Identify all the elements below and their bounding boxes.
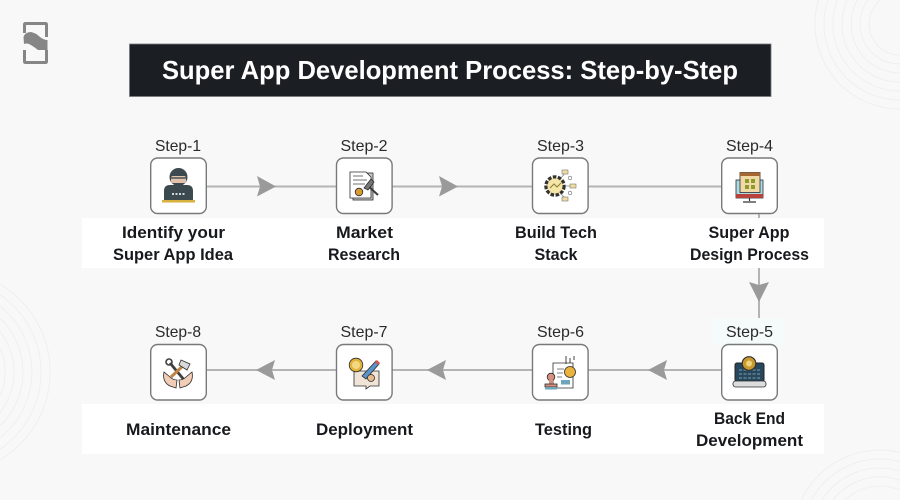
icon: coin, pencil and notes [349, 358, 380, 389]
step 7 [316, 324, 414, 439]
arrow: step 5 to 6 [648, 360, 667, 380]
step 8: Maintenance [126, 421, 231, 439]
step 3: Step-3 [537, 138, 584, 155]
arrow: step 6 to 7 [427, 360, 446, 380]
step 1: Super App Idea [113, 246, 234, 264]
logo [24, 24, 48, 62]
step 3 [515, 138, 597, 264]
step 1: Step-1 [155, 138, 201, 155]
arrow: step 7 to 8 [256, 360, 275, 380]
white label band: bottom row [82, 404, 824, 454]
icon: tools over hands [164, 359, 192, 388]
step 5 [696, 324, 804, 450]
step 1: Identify your [122, 224, 226, 242]
step 5: Development [696, 432, 804, 450]
step 5 label highlight [713, 318, 785, 345]
step 6: Step-6 [537, 324, 584, 341]
step 2 [328, 138, 400, 264]
step 7: Deployment [316, 421, 414, 439]
step 3: Build Tech [515, 224, 597, 242]
icon: document and gavel [350, 172, 378, 200]
step 8: Step-8 [155, 324, 201, 341]
step 4 [690, 138, 809, 264]
icon: laptop with coin [733, 357, 766, 387]
step 2: Research [328, 246, 400, 264]
white label band: top row [82, 218, 824, 268]
icon: gear with nodes [546, 170, 576, 201]
arrow: step 2 to 3 [439, 176, 458, 196]
title [130, 44, 771, 96]
icon: design monitor [736, 172, 763, 202]
step 4: Super App [708, 224, 790, 242]
step 2: Market [336, 224, 394, 242]
step 3: Stack [534, 246, 578, 264]
step 1 [113, 138, 234, 264]
icon: stamp and document [545, 356, 576, 390]
step 5: Back End [714, 410, 785, 428]
step 8 [126, 324, 231, 439]
step 4: Design Process [690, 246, 809, 264]
step 5: Step-5 [726, 324, 773, 341]
icon: hacker at laptop [162, 168, 195, 202]
step 6 [532, 324, 592, 439]
connector lines [206, 186, 759, 370]
arrow: step 1 to 2 [257, 176, 276, 196]
title: Super App Development Process: Step-by-Step [162, 55, 738, 85]
step 6: Testing [535, 421, 592, 439]
step 4: Step-4 [726, 138, 773, 155]
step 7: Step-7 [340, 324, 388, 341]
step 2: Step-2 [340, 138, 388, 155]
arrow: step 4 to 5 [749, 282, 769, 302]
